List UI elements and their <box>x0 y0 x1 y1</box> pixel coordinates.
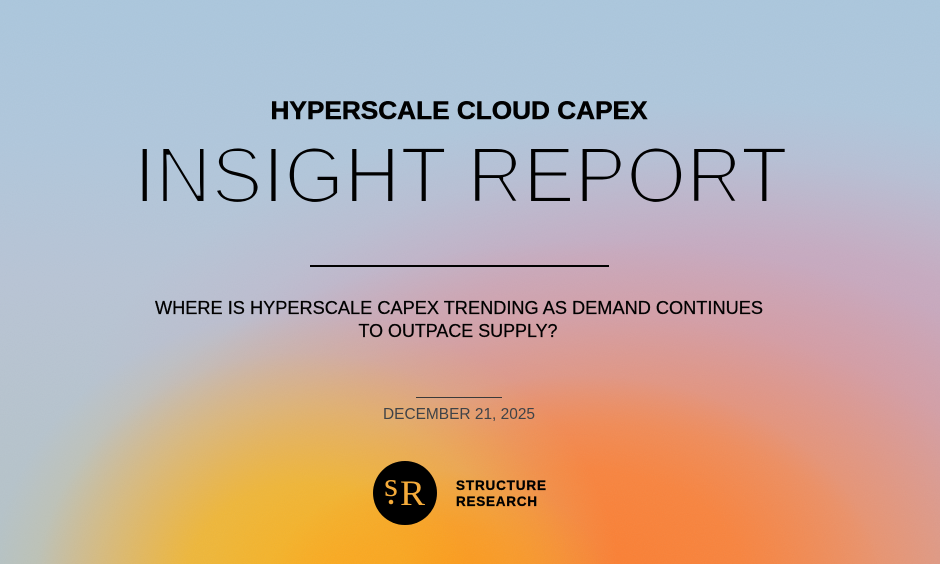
question text: TO OUTPACE SUPPLY? <box>358 321 558 341</box>
question text: WHERE IS HYPERSCALE CAPEX TRENDING AS DEMAND CONTINUES <box>155 298 763 318</box>
logo wordmark: RESEARCH <box>456 494 537 509</box>
title: insight report: INSIGHT REPORT <box>134 130 788 220</box>
date: DECEMBER 21, 2025 <box>383 406 535 423</box>
short divider <box>416 397 502 398</box>
heading: hyperscale cloud capex: HYPERSCALE CLOUD CAPEX <box>270 97 648 125</box>
logo: structure research <box>373 461 546 525</box>
divider <box>310 265 609 267</box>
logo mark <box>373 461 437 525</box>
question text <box>155 298 763 341</box>
logo wordmark: STRUCTURE <box>456 478 546 493</box>
logo mark: s <box>384 467 398 504</box>
logo mark: R <box>400 473 425 513</box>
logo wordmark <box>456 478 546 509</box>
